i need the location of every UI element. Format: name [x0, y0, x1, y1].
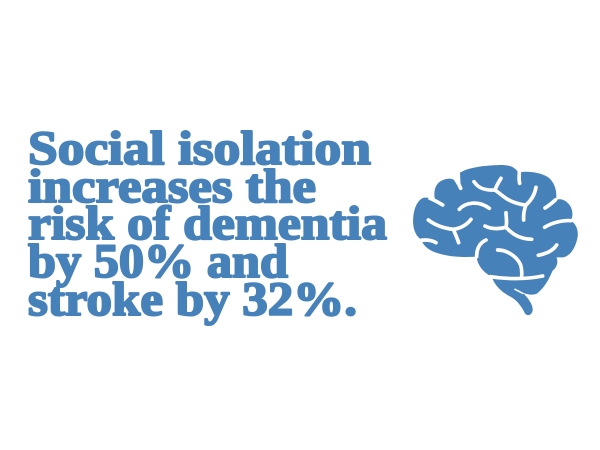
brain folds [420, 173, 571, 293]
headline text: increases the [28, 160, 316, 213]
headline text: stroke by 32%. [28, 273, 357, 326]
headline text: by 50% and [28, 235, 288, 288]
icon: brain [413, 165, 578, 315]
headline text: risk of dementia [28, 197, 387, 250]
headline text [28, 122, 387, 326]
headline text: Social isolation [28, 122, 371, 175]
